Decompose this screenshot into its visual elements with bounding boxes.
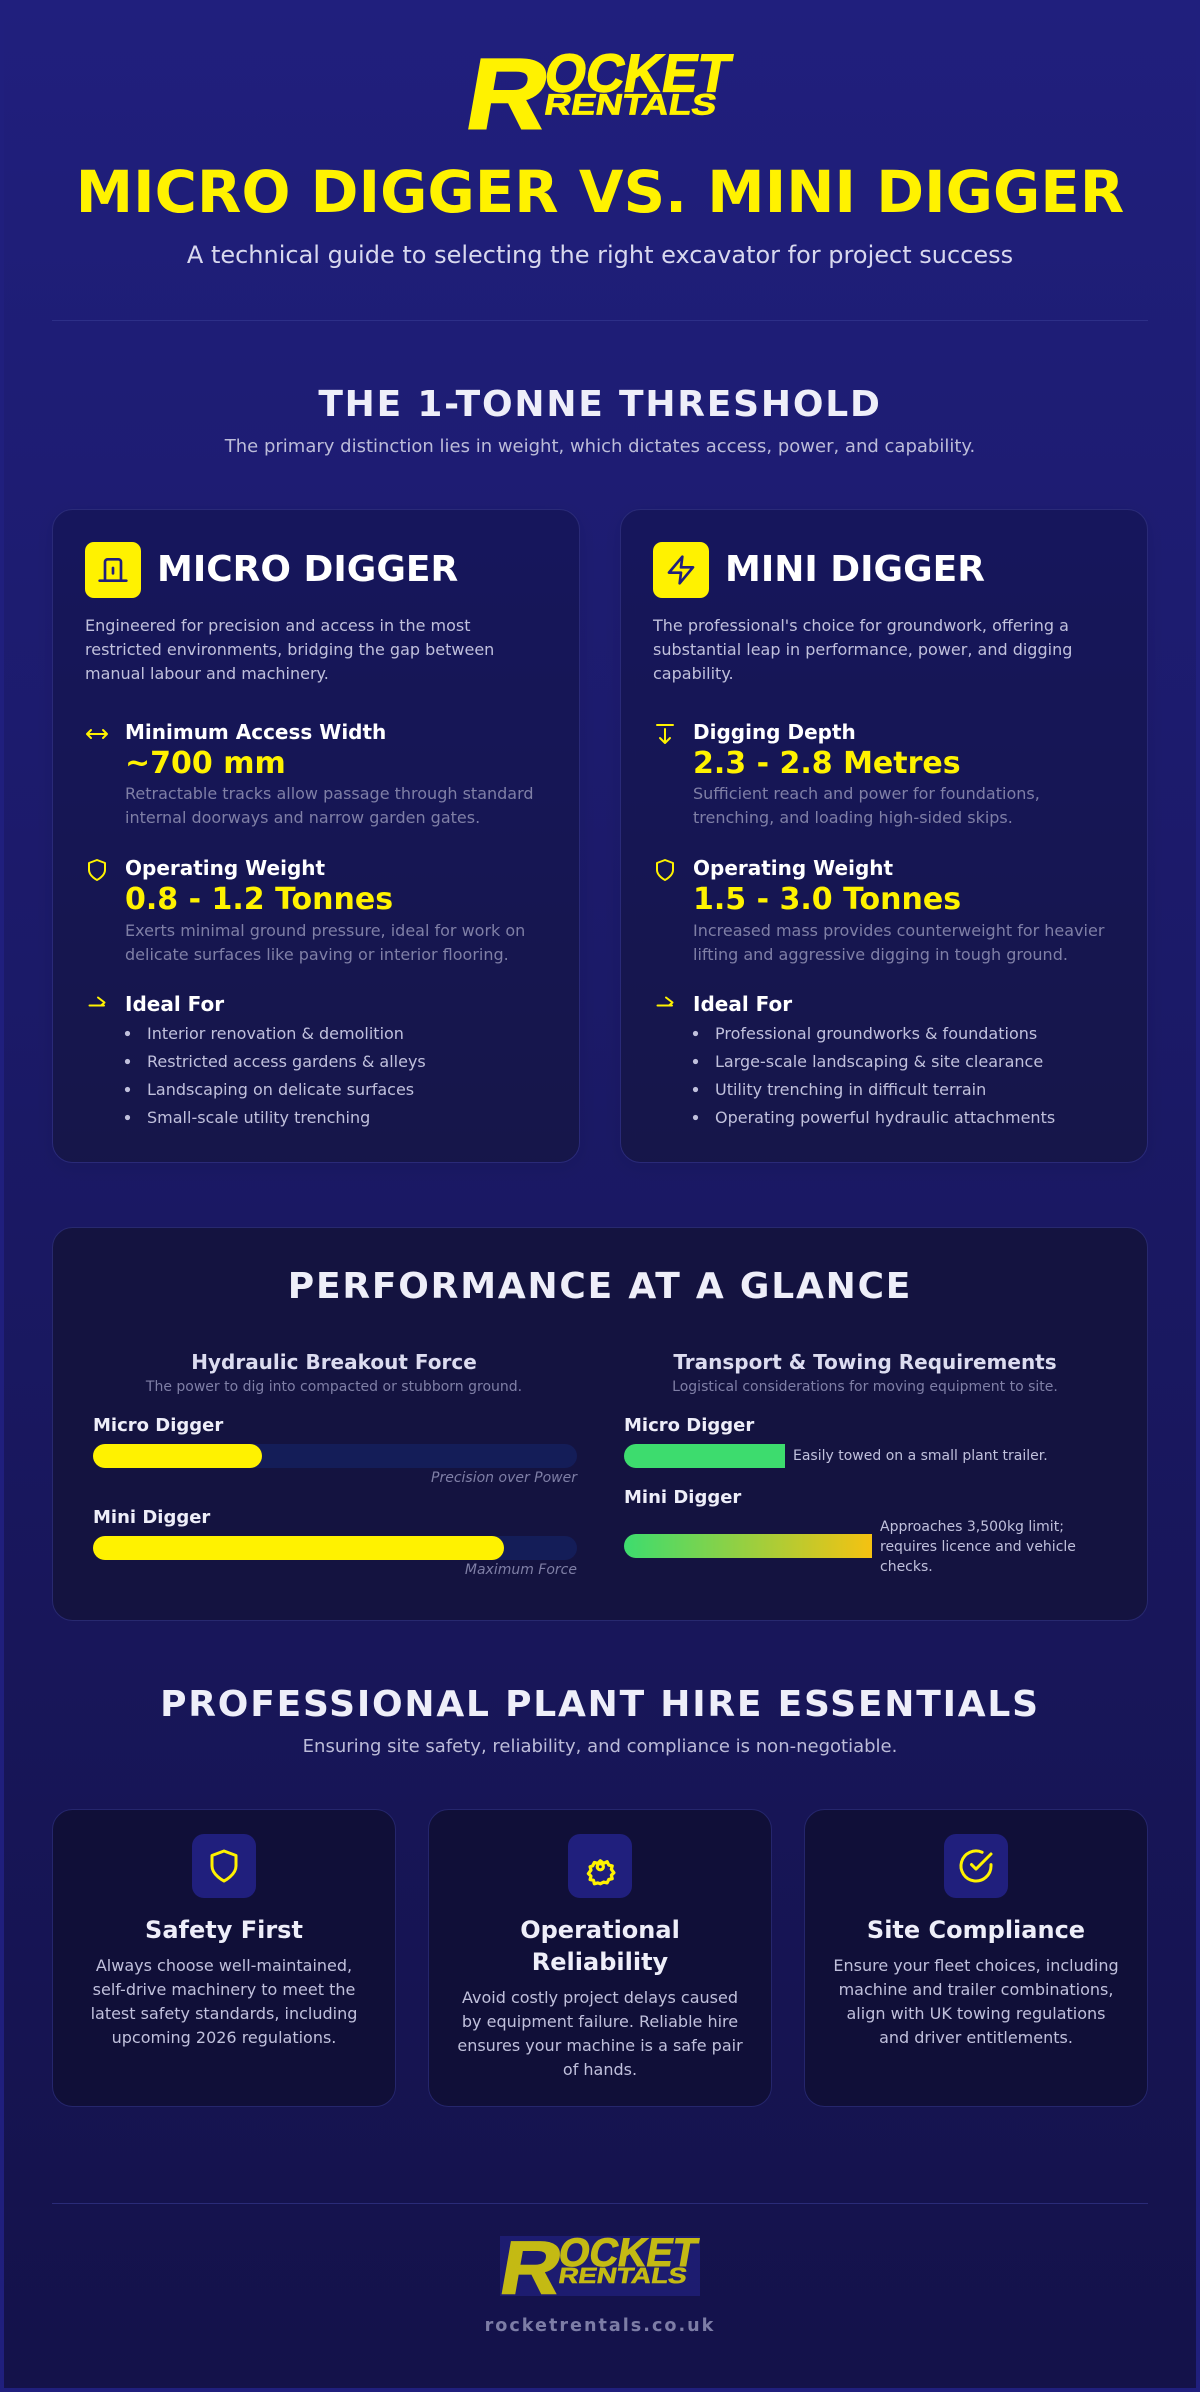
spec: operating weight xyxy=(693,856,1105,964)
spec: minimum access width: ~700 mm xyxy=(125,746,286,781)
spec: ideal for: Ideal For xyxy=(125,992,224,1016)
spec: operating weight: 0.8 - 1.2 Tonnes xyxy=(125,882,393,917)
panel: safety first xyxy=(52,1810,396,2106)
spec: ideal for: Professional groundworks & foundations xyxy=(715,1024,1037,1043)
heading: plant hire essentials: PROFESSIONAL PLANT HIRE ESSENTIALS xyxy=(160,1684,1040,1725)
card description: restricted environments, bridging the gap between xyxy=(85,640,494,659)
header logo: RENTALS xyxy=(542,88,719,121)
panel: site compliance: Site Compliance xyxy=(867,1916,1085,1944)
spec: ideal for: Ideal For xyxy=(693,992,792,1016)
footer logo xyxy=(494,2227,702,2310)
spec: minimum access width: internal doorways and narrow garden gates. xyxy=(125,808,480,827)
chart: transport and towing: checks. xyxy=(880,1559,933,1575)
spec: ideal for: Large-scale landscaping & site clearance xyxy=(715,1052,1043,1071)
icon: lightning xyxy=(653,542,709,598)
spec: minimum access width xyxy=(125,720,534,827)
title: MICRO DIGGER VS. MINI DIGGER xyxy=(76,159,1124,226)
chart: hydraulic breakout force: Micro Digger xyxy=(93,1415,223,1436)
header logo xyxy=(458,38,736,150)
card title: MINI DIGGER xyxy=(725,549,985,590)
chart: transport and towing xyxy=(624,1350,1076,1575)
panel: site compliance: Ensure your fleet choices, including xyxy=(833,1956,1119,1975)
icon: turn arrow xyxy=(658,998,672,1006)
card description: capability. xyxy=(653,664,734,683)
header logo: OCKET xyxy=(540,44,736,103)
card description: Engineered for precision and access in the most xyxy=(85,616,471,635)
subtitle: A technical guide to selecting the right excavator for project success xyxy=(187,241,1013,269)
spec: ideal for: Landscaping on delicate surfaces xyxy=(147,1080,414,1099)
chart: hydraulic breakout force: Precision over Power xyxy=(431,1470,578,1486)
panel: operational reliability: of hands. xyxy=(563,2060,637,2079)
icon: shield xyxy=(657,860,673,880)
card description: The professional's choice for groundwork, offering a xyxy=(652,616,1069,635)
card description xyxy=(85,616,494,683)
icon: turn arrow xyxy=(90,998,104,1006)
spec: minimum access width: Retractable tracks allow passage through standard xyxy=(125,784,534,803)
spec: operating weight: Operating Weight xyxy=(125,856,325,880)
chart: hydraulic breakout force xyxy=(93,1350,578,1578)
panel: micro digger xyxy=(52,510,580,1162)
chart: transport and towing: Easily towed on a small plant trailer. xyxy=(793,1448,1048,1464)
spec: ideal for xyxy=(693,992,1055,1127)
spec: operating weight: Exerts minimal ground pressure, ideal for work on xyxy=(125,921,525,940)
panel: safety first: latest safety standards, including xyxy=(91,2004,357,2023)
footer logo: R xyxy=(494,2227,569,2310)
panel: performance at a glance xyxy=(52,1228,1148,1620)
panel: site compliance: machine and trailer combinations, xyxy=(839,1980,1113,1999)
spec: ideal for: Interior renovation & demolition xyxy=(147,1024,404,1043)
chart: hydraulic breakout force: Mini Digger xyxy=(93,1507,210,1528)
panel: safety first: Safety First xyxy=(145,1916,303,1944)
section intro: Ensuring site safety, reliability, and compliance is non-negotiable. xyxy=(303,1736,897,1757)
card title: MICRO DIGGER xyxy=(157,549,458,590)
spec: operating weight: 1.5 - 3.0 Tonnes xyxy=(693,882,961,917)
spec: operating weight: Operating Weight xyxy=(693,856,893,880)
spec: digging depth: trenching, and loading high-sided skips. xyxy=(693,808,1013,827)
spec: ideal for xyxy=(125,992,426,1127)
panel: operational reliability: by equipment failure. Reliable hire xyxy=(462,2012,738,2031)
spec: ideal for: Utility trenching in difficult terrain xyxy=(715,1080,986,1099)
section intro: The primary distinction lies in weight, which dictates access, power, and capability. xyxy=(224,436,975,457)
header logo: R xyxy=(458,38,558,150)
chart: transport and towing: Transport & Towing Requirements xyxy=(673,1350,1057,1374)
chart: transport and towing: Logistical considerations for moving equipment to site. xyxy=(672,1379,1058,1395)
icon: check circle xyxy=(944,1834,1008,1898)
spec: digging depth xyxy=(693,720,1040,827)
icon: door xyxy=(85,542,141,598)
card description: manual labour and machinery. xyxy=(85,664,329,683)
footer website: rocketrentals.co.uk xyxy=(485,2316,715,2336)
spec: operating weight: delicate surfaces like paving or interior flooring. xyxy=(125,945,509,964)
icon: shield xyxy=(89,860,105,880)
spec: digging depth: 2.3 - 2.8 Metres xyxy=(693,746,961,781)
panel: mini digger xyxy=(620,510,1148,1162)
spec: ideal for: Restricted access gardens & alleys xyxy=(147,1052,426,1071)
heading: PERFORMANCE AT A GLANCE xyxy=(288,1266,912,1307)
card description: substantial leap in performance, power, and digging xyxy=(653,640,1072,659)
icon: width arrows xyxy=(87,730,107,738)
spec: operating weight: Increased mass provides counterweight for heavier xyxy=(693,921,1105,940)
chart: transport and towing: Approaches 3,500kg limit; xyxy=(880,1519,1064,1535)
panel: operational reliability: Avoid costly project delays caused xyxy=(462,1988,738,2007)
footer logo: OCKET xyxy=(555,2230,702,2275)
chart: transport and towing: Micro Digger xyxy=(624,1415,754,1436)
panel: safety first: upcoming 2026 regulations. xyxy=(112,2028,336,2047)
card description xyxy=(652,616,1072,683)
heading: the 1-tonne threshold: THE 1-TONNE THRESHOLD xyxy=(318,384,882,425)
spec: operating weight: lifting and aggressive digging in tough ground. xyxy=(693,945,1068,964)
chart: transport and towing: Mini Digger xyxy=(624,1487,741,1508)
chart: hydraulic breakout force: Maximum Force xyxy=(465,1562,577,1578)
spec: ideal for: Small-scale utility trenching xyxy=(147,1108,370,1127)
chart: hydraulic breakout force: Hydraulic Breakout Force xyxy=(191,1350,477,1374)
panel: operational reliability: ensures your machine is a safe pair xyxy=(457,2036,743,2055)
panel: safety first: self-drive machinery to meet the xyxy=(93,1980,355,1999)
icon: gear xyxy=(568,1834,632,1898)
spec: digging depth: Digging Depth xyxy=(693,720,856,744)
spec: minimum access width: Minimum Access Width xyxy=(125,720,386,744)
spec: operating weight xyxy=(125,856,525,964)
chart: hydraulic breakout force: The power to dig into compacted or stubborn ground. xyxy=(145,1379,522,1395)
panel: safety first: Always choose well-maintained, xyxy=(96,1956,352,1975)
spec: digging depth: Sufficient reach and power for foundations, xyxy=(693,784,1040,803)
icon: depth arrow xyxy=(657,725,673,743)
footer logo: RENTALS xyxy=(557,2263,689,2288)
panel: site compliance: align with UK towing regulations xyxy=(847,2004,1105,2023)
panel: operational reliability: Operational xyxy=(520,1916,680,1944)
panel: operational reliability: Reliability xyxy=(532,1948,669,1976)
panel: site compliance xyxy=(804,1810,1148,2106)
icon: shield xyxy=(192,1834,256,1898)
chart: transport and towing: requires licence and vehicle xyxy=(880,1539,1076,1555)
panel: site compliance: and driver entitlements. xyxy=(879,2028,1073,2047)
panel: operational reliability xyxy=(428,1810,772,2106)
spec: ideal for: Operating powerful hydraulic attachments xyxy=(715,1108,1055,1127)
